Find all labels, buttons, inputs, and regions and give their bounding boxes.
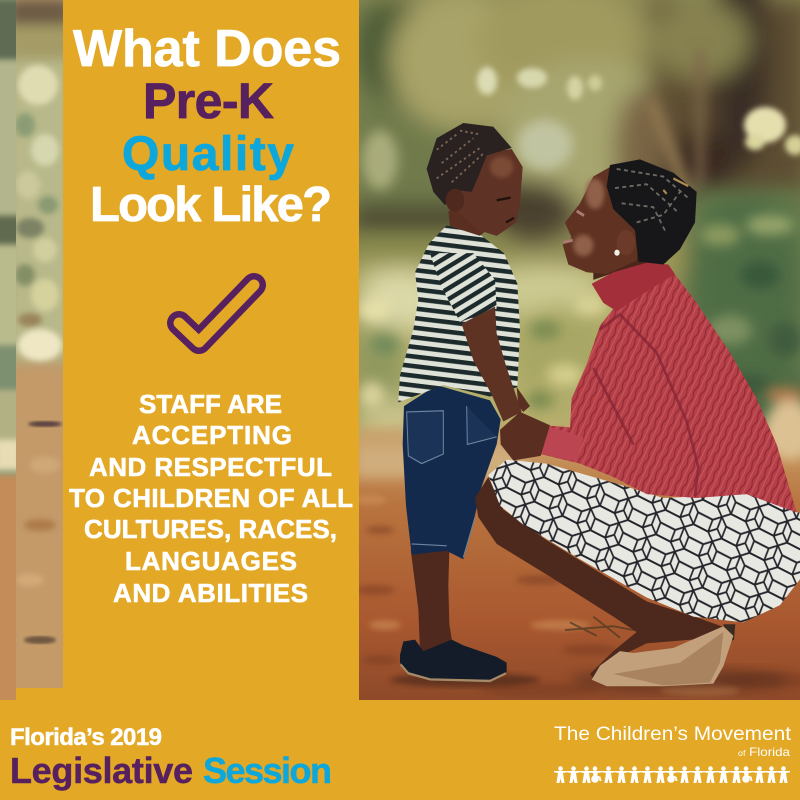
mother's ear (617, 230, 635, 255)
mother (475, 159, 800, 686)
earring (614, 250, 620, 256)
title line: What Does: What Does (73, 20, 341, 78)
child's face (450, 149, 523, 236)
clasped hands (500, 412, 550, 461)
title (73, 20, 341, 232)
child's shorts (403, 385, 501, 559)
left edge strip of photo (0, 0, 16, 700)
sweater cuff (540, 425, 583, 462)
child's hair (427, 123, 512, 205)
logo subtitle: of Florida (738, 745, 790, 759)
title line: Quality: Quality (122, 128, 294, 181)
child (398, 123, 523, 681)
shorts details (407, 406, 497, 557)
footer heading (10, 724, 332, 791)
turtleneck (592, 263, 675, 311)
mirrored strip of photo beside the panel (16, 0, 63, 688)
mother's hair (607, 159, 697, 265)
mother's second shoe heel (723, 624, 735, 643)
icon: row of paper-doll children (554, 766, 790, 783)
mother's sweater (540, 272, 797, 513)
child's arm (462, 307, 522, 421)
statement text: AND RESPECTFUL (89, 452, 332, 482)
mother and child figures (398, 123, 800, 686)
mother's leg (475, 477, 727, 678)
shoe shading (613, 632, 723, 686)
statement text: ACCEPTING (132, 420, 292, 450)
logo: The Children's Movement of Florida (554, 724, 792, 783)
statement text: LANGUAGES (125, 546, 297, 576)
statement text: CULTURES, RACES, (84, 514, 337, 544)
mother's lips and eye (563, 211, 584, 242)
child's sleeve (430, 253, 497, 322)
statement text (69, 389, 353, 608)
title line: Look Like?: Look Like? (90, 178, 332, 232)
statement text: AND ABILITIES (113, 578, 308, 608)
footer word: Session: Session (203, 750, 332, 791)
sweater arm shadow (593, 314, 698, 496)
child's ear (446, 189, 464, 212)
footer word: Legislative: Legislative (10, 750, 193, 791)
child's forehead highlight (490, 156, 513, 178)
mother's facial highlights (573, 178, 604, 256)
hair braid texture (615, 169, 690, 234)
child's eye and mouth (497, 198, 514, 222)
footer band (0, 700, 800, 800)
icon: check mark (179, 285, 254, 342)
logo name: The Children’s Movement (554, 724, 792, 745)
statement text: STAFF ARE (139, 389, 282, 419)
child's neck (448, 207, 487, 236)
child's shirt (398, 226, 520, 402)
footer line: Florida's 2019: Florida’s 2019 (10, 724, 162, 751)
hair golden tips (663, 178, 688, 194)
child's hand (517, 387, 530, 412)
child's legs (411, 550, 453, 651)
mother's face (563, 167, 640, 274)
main scene background (350, 0, 800, 700)
child's hair texture (437, 131, 483, 182)
twig on ground (565, 617, 643, 638)
child's shoes (400, 640, 507, 681)
mother's shoe (592, 626, 733, 686)
title line: Pre-K: Pre-K (143, 73, 274, 129)
yellow text panel (63, 0, 359, 665)
mother's neck (593, 245, 667, 280)
statement text: TO CHILDREN OF ALL (69, 483, 353, 513)
mother's skirt (488, 460, 800, 622)
